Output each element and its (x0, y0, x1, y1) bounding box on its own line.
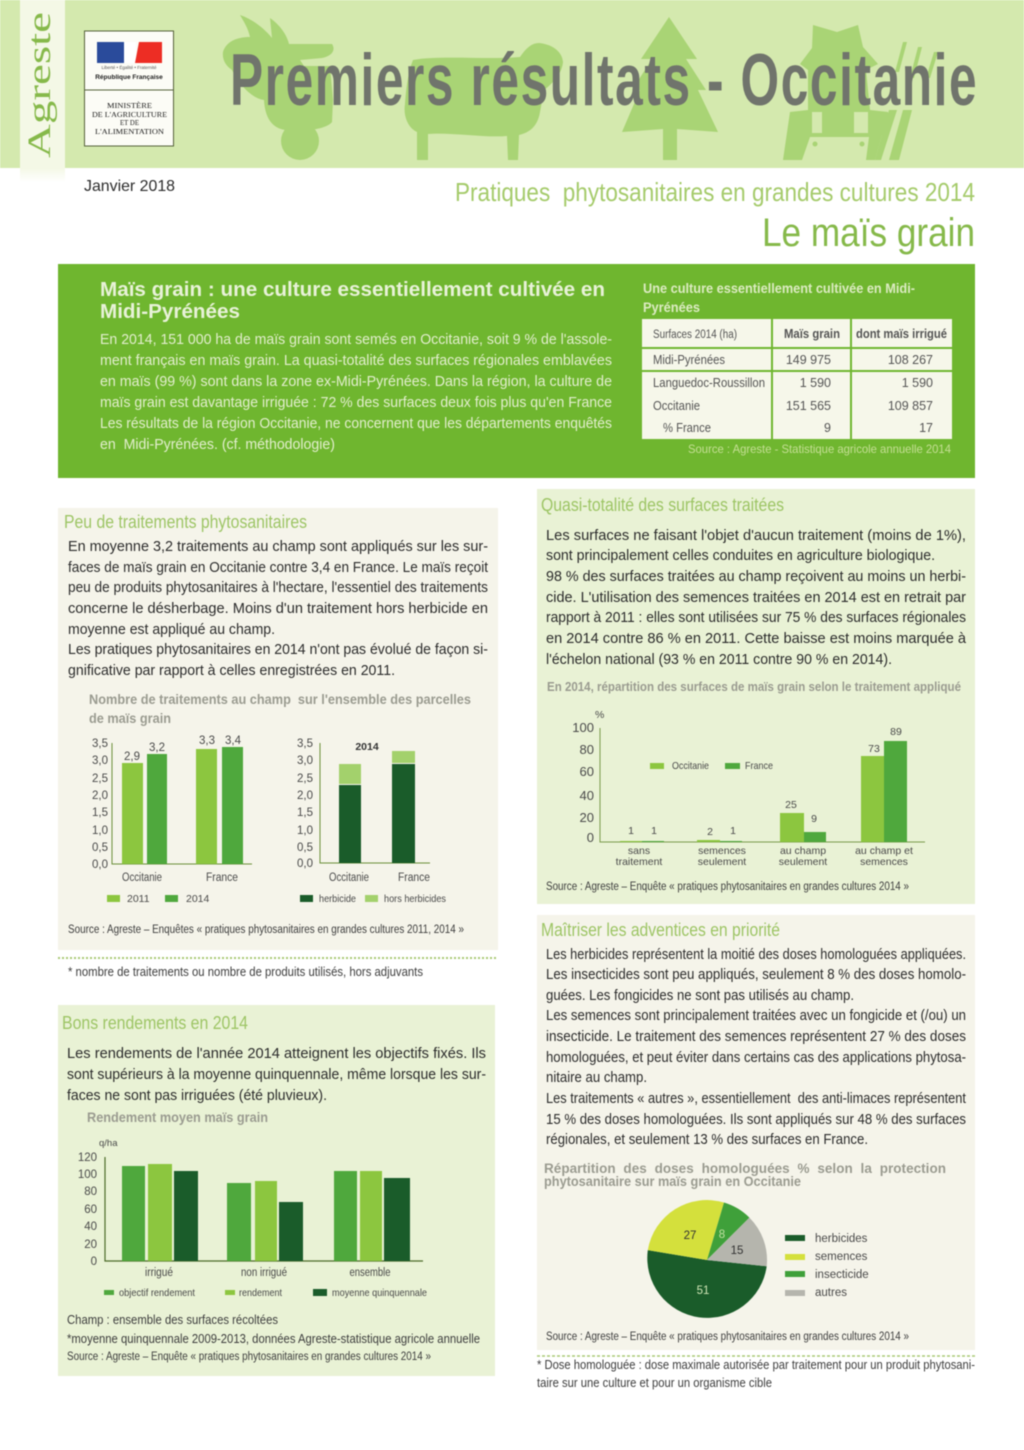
bar chart: yield (78, 1138, 427, 1299)
summary heading: Midi-Pyrénées (100, 301, 240, 323)
bar chart: herbicide split 2014 (297, 738, 446, 905)
table heading: Pyrénées (643, 300, 700, 315)
bar chart: yield: 0 (91, 1256, 97, 1268)
logo: ministry block: République Française (95, 74, 163, 81)
bar chart: treatment distribution: 60 (580, 764, 594, 779)
logo: ministry block: MINISTÈRE (107, 100, 152, 110)
weeds text: nitaire au champ. (546, 1069, 647, 1086)
summary heading (100, 279, 605, 323)
table: surfaces: dont maïs irrigué (856, 327, 947, 341)
treated surfaces text: l'échelon national (93 % en 2011 contre 90 % en 2014). (546, 651, 892, 668)
table: surfaces: Languedoc-Roussillon (653, 376, 765, 390)
table: surfaces: % France (663, 421, 711, 435)
icon: goat silhouette (223, 15, 334, 160)
bar chart: treatment distribution (572, 709, 925, 868)
bar chart: treatments 2011 and 2014: 3,0 (92, 755, 108, 767)
bar chart: treatments 2011 and 2014 (92, 735, 252, 905)
legend: objectif rendement (119, 1287, 195, 1299)
legend: rendement (239, 1287, 282, 1299)
bar chart: yield: 60 (84, 1204, 97, 1216)
legend: autres (815, 1287, 847, 1299)
treatments text: gnificative par rapport à celles enregistrées en 2011. (68, 662, 395, 679)
bar chart: treatment distribution: 100 (572, 720, 594, 735)
panel: treated surfaces (537, 489, 975, 904)
notes and source: Champ : ensemble des surfaces récoltées (67, 1313, 278, 1327)
treated surfaces text: Les surfaces ne faisant l'objet d'aucun traitement (moins de 1%), (546, 527, 966, 544)
bar chart: treatment distribution: traitement (616, 856, 662, 868)
bar chart: treatments 2011 and 2014: 3,2 (149, 742, 165, 754)
bar chart: treatments 2011 and 2014: 2,0 (92, 790, 108, 802)
summary text: Les résultats de la région Occitanie, ne concernent que les départements enquêtés (100, 415, 612, 432)
bar chart: herbicide split 2014: France (398, 872, 430, 884)
chart title: treatments (89, 691, 471, 726)
footnote: approved dose: * Dose homologuée : dose maximale autorisée par traitement pour un produit phytosani- (537, 1358, 975, 1372)
summary text: En 2014, 151 000 ha de maïs grain sont semés en Occitanie, soit 9 % de l'assole- (100, 331, 612, 348)
pie chart: doses (647, 1200, 869, 1318)
treatments text: En moyenne 3,2 traitements au champ sont appliqués sur les sur- (68, 538, 488, 555)
legend: insecticide (815, 1269, 869, 1281)
bar chart: treatment distribution: 20 (580, 810, 594, 825)
treatments text: faces de maïs grain en Occitanie contre 3,4 en France. Le maïs reçoit (68, 559, 489, 576)
weeds text: homologuées, et peut éviter dans certains cas des applications phytosa- (546, 1049, 966, 1066)
legend (107, 893, 210, 905)
yields text (67, 1045, 486, 1104)
table: surfaces: 151 565 (786, 399, 831, 413)
table: surfaces: Maïs grain (784, 327, 840, 341)
bar chart: treatment distribution: 25 (785, 799, 797, 811)
summary text: ment français en maïs grain. La quasi-totalité des surfaces régionales emblavées (100, 352, 612, 369)
legend (650, 760, 773, 772)
bar chart: treatment distribution: % (595, 709, 604, 721)
legend: herbicides (815, 1233, 868, 1245)
notes and source: Source : Agreste – Enquête « pratiques phytosanitaires en grandes cultures 2014 » (67, 1351, 431, 1363)
bar chart: treatment distribution: semences (860, 856, 908, 868)
weeds text: 15 % des doses homologuées. Ils sont appliqués sur 48 % des surfaces (546, 1111, 966, 1128)
icon: sheep silhouette (405, 43, 563, 160)
table: surfaces: 1 590 (902, 376, 933, 390)
summary heading: Maïs grain : une culture essentiellement cultivée en (100, 279, 605, 301)
bar chart: herbicide split 2014: 2014 (355, 741, 379, 753)
source: Source : Agreste – Enquêtes « pratiques phytosanitaires en grandes cultures 2011, 2014 » (68, 924, 464, 936)
bar chart: treatment distribution: 1 (651, 825, 657, 837)
treated surfaces text: cide. L'utilisation des semences traitées en 2014 est en retrait par (546, 589, 966, 606)
panel: yields (58, 1005, 495, 1376)
bar chart: yield: 20 (84, 1239, 97, 1251)
summary text: en maïs (99 %) sont dans la zone ex-Midi-Pyrénées. Dans la région, la culture de (100, 373, 612, 390)
source: Source : Agreste – Enquête « pratiques phytosanitaires en grandes cultures 2014 » (546, 881, 909, 893)
table: surfaces: 149 975 (786, 353, 831, 367)
legend: hors herbicides (384, 893, 446, 905)
notes and source: *moyenne quinquennale 2009-2013, données Agreste-statistique agricole annuelle (67, 1332, 480, 1346)
table source: Source : Agreste - Statistique agricole annuelle 2014 (688, 442, 951, 456)
legend: Occitanie (672, 760, 709, 772)
logo: ministry block: L'ALIMENTATION (95, 127, 165, 136)
bar chart: treatments 2011 and 2014: 0,0 (92, 859, 108, 871)
bar chart: herbicide split 2014: 1,5 (297, 807, 313, 819)
bar chart: yield: non irrigué (241, 1267, 287, 1279)
logo: ministry block: Liberté • Égalité • Fraternité (102, 64, 157, 70)
logo: ministry block: ET DE (120, 118, 139, 127)
bar chart: treatment distribution: 9 (811, 813, 817, 825)
weeds text (546, 946, 967, 1148)
summary text: maïs grain est davantage irriguée : 72 % des surfaces deux fois plus qu'en France (100, 394, 612, 411)
yields text: faces ne sont pas irriguées (été pluvieux). (67, 1087, 327, 1104)
yields heading: Bons rendements en 2014 (62, 1013, 248, 1033)
chart title: yield: Rendement moyen maïs grain (87, 1109, 268, 1125)
source: Source : Agreste – Enquête « pratiques phytosanitaires en grandes cultures 2014 » (546, 1331, 909, 1343)
bar chart: treatments 2011 and 2014: 3,5 (92, 738, 108, 750)
table: surfaces: Midi-Pyrénées (653, 353, 725, 367)
legend: 2011 (127, 893, 150, 905)
bar chart: treatments 2011 and 2014: Occitanie (122, 872, 162, 884)
bar chart: treatment distribution: 1 (628, 825, 634, 837)
treatments text: concerne le désherbage. Moins d'un traitement hors herbicide en (68, 600, 488, 617)
legend: moyenne quinquennale (332, 1287, 427, 1299)
pie chart: doses: 15 (731, 1245, 743, 1257)
summary text (100, 331, 612, 453)
legend: France (745, 760, 773, 772)
table: surfaces: 17 (919, 421, 933, 435)
treatments text: Les pratiques phytosanitaires en 2014 n'ont pas évolué de façon si- (68, 641, 488, 658)
notes and source (67, 1313, 480, 1363)
bar chart: treatment distribution: au champ (780, 845, 826, 857)
treated surfaces text (546, 527, 967, 668)
footnote: approved dose: taire sur une culture et pour un organisme cible (537, 1376, 772, 1390)
legend: semences (815, 1251, 868, 1263)
bar chart: treatments 2011 and 2014: 0,5 (92, 842, 108, 854)
pie chart: doses: 27 (684, 1230, 696, 1242)
bar chart: herbicide split 2014: 1,0 (297, 825, 313, 837)
legend (300, 893, 446, 905)
weeds text: Les traitements « autres », essentiellement des anti-limaces représentent (546, 1090, 967, 1107)
bar chart: treatments 2011 and 2014: France (206, 872, 238, 884)
bar chart: treatments 2011 and 2014: 2,9 (124, 751, 140, 763)
logo: ministry block: DE L'AGRICULTURE (92, 110, 167, 119)
table: surfaces: 1 590 (800, 376, 831, 390)
bar chart: treatments 2011 and 2014: 3,4 (225, 735, 242, 747)
bar chart: herbicide split 2014: 0,5 (297, 842, 313, 854)
bar chart: treatments 2011 and 2014: 1,0 (92, 825, 108, 837)
bar chart: treatments 2011 and 2014: 3,3 (199, 735, 215, 747)
panel: treatments (58, 508, 498, 950)
chart title: doses (544, 1161, 946, 1189)
bar chart: treatment distribution: 89 (890, 726, 902, 738)
footnote: treatments: * nombre de traitements ou nombre de produits utilisés, hors adjuvants (68, 965, 423, 979)
bar chart: treatment distribution: au champ et (855, 845, 913, 857)
icon: fir tree silhouette (622, 17, 718, 160)
pie chart: doses: 8 (719, 1229, 725, 1241)
bar chart: yield: q/ha (99, 1138, 118, 1149)
table: surfaces (642, 319, 952, 439)
legend: 2014 (186, 893, 210, 905)
bar chart: yield: ensemble (350, 1267, 390, 1279)
treated surfaces heading: Quasi-totalité des surfaces traitées (541, 495, 784, 515)
bar chart: herbicide split 2014: 2,0 (297, 790, 313, 802)
bar chart: treatment distribution: seulement (698, 856, 746, 868)
summary text: en Midi-Pyrénées. (cf. méthodologie) (100, 436, 335, 453)
legend (104, 1287, 427, 1299)
bar chart: treatments 2011 and 2014: 1,5 (92, 807, 108, 819)
table: surfaces: 108 267 (888, 353, 933, 367)
bar chart: treatment distribution: sans (628, 845, 650, 857)
yields text: sont supérieurs à la moyenne quinquennale, même lorsque les sur- (67, 1066, 486, 1083)
treatments text: peu de produits phytosanitaires à l'hectare, l'essentiel des traitements (68, 579, 488, 596)
yields text: Les rendements de l'année 2014 atteignent les objectifs fixés. Ils (67, 1045, 486, 1062)
treatments text (68, 538, 489, 679)
title: Premiers résultats - Occitanie (230, 40, 977, 121)
Agreste wordmark: Agreste (22, 12, 58, 158)
bar chart: herbicide split 2014: 0,0 (297, 858, 313, 870)
table heading (643, 281, 915, 315)
footnote: approved dose (537, 1358, 975, 1390)
bar chart: treatment distribution: semences (698, 845, 746, 857)
weeds text: Les semences sont principalement traitées avec un fongicide et (/ou) un (546, 1007, 966, 1024)
chart title: doses: Répartition des doses homologuées % selon la protection (544, 1161, 946, 1176)
panel: summary (58, 264, 975, 478)
table: surfaces: Occitanie (653, 399, 700, 413)
bar chart: treatments 2011 and 2014: 2,5 (92, 773, 108, 785)
bar chart: treatment distribution: 0 (587, 830, 594, 845)
bar chart: treatment distribution: 1 (730, 825, 736, 837)
icon: French flag (97, 42, 162, 63)
chart title: treatments: Nombre de traitements au champ sur l'ensemble des parcelles (89, 691, 471, 707)
logo: ministry block (84, 31, 174, 146)
weeds text: Les insecticides sont peu appliqués, seulement 8 % des doses homolo- (546, 966, 966, 983)
bar chart: yield: 100 (78, 1169, 97, 1181)
legend: herbicide (319, 893, 356, 905)
panel: weeds (537, 915, 975, 1350)
treatments heading: Peu de traitements phytosanitaires (64, 512, 307, 532)
topic heading: Le maïs grain (762, 211, 975, 255)
chart title: doses: phytosanitaire sur maïs grain en Occitanie (544, 1174, 801, 1189)
weeds heading: Maîtriser les adventices en priorité (541, 920, 780, 940)
bar chart: treatment distribution: 73 (868, 743, 880, 755)
table: surfaces: 109 857 (888, 399, 933, 413)
icon: cow and grass silhouette (783, 25, 938, 160)
bar chart: treatment distribution: seulement (779, 856, 827, 868)
bar chart: yield: 40 (84, 1221, 97, 1233)
bar chart: herbicide split 2014: Occitanie (329, 872, 369, 884)
pie chart: doses: 51 (697, 1285, 709, 1297)
chart title: treatments: de maïs grain (89, 710, 171, 726)
weeds text: régionales, et seulement 13 % des surfaces en France. (546, 1131, 868, 1148)
weeds text: guées. Les fongicides ne sont pas utilisés au champ. (546, 987, 854, 1004)
bar chart: herbicide split 2014: 3,0 (297, 755, 313, 767)
treatments text: moyenne est appliqué au champ. (68, 621, 275, 638)
bar chart: herbicide split 2014: 3,5 (297, 738, 313, 750)
date: Janvier 2018 (84, 178, 175, 195)
treated surfaces text: sont principalement celles conduites en agriculture biologique. (546, 547, 935, 564)
table heading: Une culture essentiellement cultivée en Midi- (643, 281, 915, 296)
bar chart: herbicide split 2014: 2,5 (297, 773, 313, 785)
header band (0, 0, 1024, 182)
table: surfaces: 9 (824, 421, 831, 435)
bar chart: yield: 120 (78, 1152, 97, 1164)
bar chart: treatment distribution: 80 (580, 742, 594, 757)
chart title: treatment distribution: En 2014, répartition des surfaces de maïs grain selon le traitement appliqué (547, 679, 961, 694)
bar chart: yield: 80 (84, 1186, 97, 1198)
bar chart: treatment distribution: 40 (580, 788, 594, 803)
weeds text: insecticide. Le traitement des semences représentent 27 % des doses (546, 1028, 966, 1045)
treated surfaces text: en 2014 contre 86 % en 2011. Cette baisse est moins marquée à (546, 630, 967, 647)
bar chart: treatment distribution: 2 (707, 826, 713, 838)
bar chart: yield: irrigué (145, 1267, 173, 1279)
treated surfaces text: rapport à 2011 : elles sont utilisées sur 75 % des surfaces régionales (546, 609, 966, 626)
table: surfaces: Surfaces 2014 (ha) (653, 329, 737, 341)
treated surfaces text: 98 % des surfaces traitées au champ reçoivent au moins un herbi- (546, 568, 966, 585)
legend (785, 1233, 869, 1299)
